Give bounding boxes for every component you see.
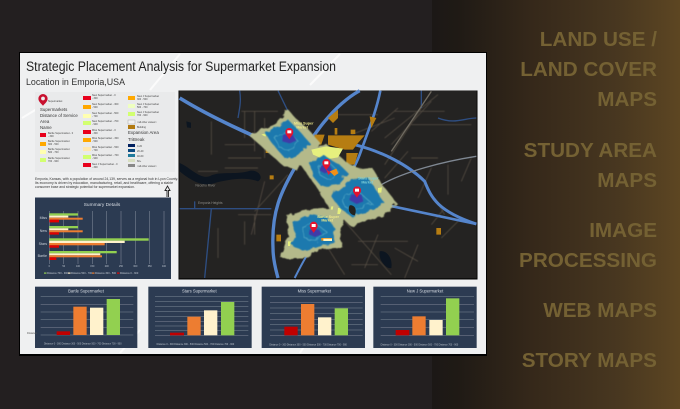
right column: service list bbox=[519, 28, 657, 372]
map sheet bbox=[19, 52, 487, 356]
right column: service list: WEB MAPS bbox=[543, 299, 657, 322]
right column: service list: PROCESSING bbox=[519, 249, 657, 272]
legend labels: 60+ bbox=[137, 160, 142, 163]
map: service area blue bbox=[265, 120, 385, 251]
map labels: Stars Super bbox=[358, 177, 379, 181]
legend swatches bbox=[40, 96, 135, 167]
chart heading: Summary Details bbox=[84, 202, 121, 208]
legend labels: - 300 bbox=[92, 166, 98, 169]
legend labels: <all other values> bbox=[137, 165, 157, 168]
chart: new j supermarket: Distance 0 - 300 Distance 300 - 500 Distance 500 - 700 Distance 700 - 900 bbox=[381, 344, 459, 347]
map: Emporia Heights bbox=[198, 201, 223, 205]
legend headings: Area bbox=[40, 119, 50, 124]
chart: summary details: 250 bbox=[119, 265, 124, 268]
map: service area core bbox=[275, 131, 371, 241]
legend headings: Supermarkets bbox=[40, 107, 68, 112]
legend labels: <all other values> bbox=[137, 121, 157, 124]
legend labels: 500 - 700 bbox=[48, 151, 59, 154]
chart: stars supermarket: Stars Supermarket bbox=[182, 289, 217, 294]
chart: bartle supermarket: Distance 0 - 300 Distance 300 - 500 Distance 500 - 700 Distance 700 - 900 bbox=[44, 342, 122, 345]
legend labels bbox=[48, 94, 159, 169]
chart: summary details: Distance 0 - 300 bbox=[120, 272, 139, 275]
legend labels: Bartle Supermarket - 0 bbox=[48, 132, 74, 135]
map: minor roads bbox=[198, 95, 471, 278]
map: water bbox=[180, 121, 392, 268]
right column: service list: MAPS bbox=[597, 169, 657, 192]
map: service area outer halo bbox=[252, 112, 395, 256]
description text bbox=[35, 177, 178, 189]
chart: bartle supermarket: Bartle Supermarket bbox=[68, 289, 105, 294]
legend labels: - 300 bbox=[92, 132, 98, 135]
background: brown gradient right bbox=[432, 0, 680, 409]
chart: summary details: 300 bbox=[133, 265, 138, 268]
chart: summary details bbox=[35, 198, 171, 279]
map labels: Market bbox=[321, 219, 334, 223]
axis label: Distance bbox=[27, 331, 38, 335]
chart: miss supermarket: Distance 0 - 300 Distance 300 - 500 Distance 500 - 700 Distance 700 - 900 bbox=[269, 344, 348, 347]
subtitle: Location in Emporia,USA bbox=[26, 77, 125, 87]
legend labels: - 300 bbox=[92, 97, 98, 100]
chart: summary details: 0 bbox=[49, 265, 51, 268]
chart: summary details: 50 bbox=[62, 265, 66, 268]
legend labels: - 900 bbox=[92, 123, 98, 126]
legend labels: Supermarket bbox=[48, 100, 63, 103]
description text: Emporia, Kansas, with a population of around 24,139, serves as a regional hub in Lyon County. bbox=[35, 177, 178, 181]
map: buildings bbox=[266, 110, 441, 241]
map: highways bbox=[180, 98, 255, 136]
map bbox=[178, 90, 478, 280]
legend headings: Distance of Service bbox=[40, 113, 78, 118]
map labels: Market bbox=[361, 181, 374, 185]
chart: summary details: Distance 300 - 500 bbox=[95, 272, 117, 275]
legend labels: New J Supermarket bbox=[137, 111, 159, 114]
right column: service list: LAND USE / bbox=[540, 28, 657, 51]
legend labels: Bartle Supermarket bbox=[48, 157, 70, 160]
chart: summary details: 100 bbox=[76, 265, 81, 268]
chart: summary details: Distance 700 - 900 bbox=[47, 272, 69, 275]
legend headings: Expansion Area bbox=[128, 130, 159, 135]
map labels: Market bbox=[296, 126, 309, 130]
legend labels: - 500 bbox=[92, 106, 98, 109]
legend labels: - 900 bbox=[92, 157, 98, 160]
map: Neosho River bbox=[195, 183, 216, 187]
legend labels: Miss Supermarket - 0 bbox=[92, 129, 116, 132]
map: pale green areas bbox=[261, 133, 382, 246]
legend labels: 300 - 500 bbox=[137, 98, 148, 101]
legend labels: - 700 bbox=[92, 149, 98, 152]
title: Strategic Placement Analysis for Supermarket Expansion bbox=[26, 59, 336, 74]
legend labels: New J Supermarket bbox=[137, 103, 159, 106]
description text: consumer base and strategic potential for supermarket expansion. bbox=[35, 185, 135, 189]
right column: service list: STORY MAPS bbox=[522, 349, 657, 372]
legend labels: Miss Supermarket - 300 bbox=[92, 137, 119, 140]
legend labels: New J Supermarket bbox=[137, 95, 159, 98]
chart: summary details: 150 bbox=[90, 265, 95, 268]
legend labels: Miss Supermarket - 500 bbox=[92, 146, 119, 149]
arrow: up bbox=[165, 186, 170, 197]
legend bbox=[35, 92, 175, 172]
legend labels: New Supermarket - 0 bbox=[92, 94, 116, 97]
right column: service list: STUDY AREA bbox=[524, 139, 657, 162]
description text: Its economy is driven by education, manufacturing, retail, and healthcare, offering a stable bbox=[35, 181, 173, 185]
chart: stars supermarket bbox=[148, 287, 252, 348]
chart: summary details: Miss bbox=[40, 216, 47, 220]
legend labels: 20-40 bbox=[137, 150, 144, 153]
legend labels: New Supermarket - 300 bbox=[92, 103, 119, 106]
chart: new j supermarket bbox=[373, 287, 477, 348]
chart: summary details: 400 bbox=[162, 265, 167, 268]
map labels bbox=[294, 122, 379, 223]
legend labels: New J Supermarket - 0 bbox=[92, 163, 118, 166]
legend labels: 40-60 bbox=[137, 155, 144, 158]
legend labels: 500 - 700 bbox=[137, 106, 148, 109]
legend labels: New Supermarket - 700 bbox=[92, 120, 119, 123]
chart: miss supermarket: Miss Supermarket bbox=[298, 289, 332, 294]
legend labels: 300 - 500 bbox=[48, 143, 59, 146]
chart: summary details: 350 bbox=[148, 265, 152, 268]
chart: miss supermarket bbox=[262, 287, 365, 348]
chart: bartle supermarket bbox=[35, 287, 137, 348]
right column: service list: MAPS bbox=[597, 88, 657, 111]
background: dark left bbox=[0, 0, 433, 409]
legend labels: Bartle Supermarket bbox=[48, 148, 70, 151]
legend labels: 0-20 bbox=[137, 145, 143, 148]
chart: summary details: Distance 500 - 700 bbox=[71, 272, 93, 275]
map labels: Miss Super bbox=[294, 122, 314, 126]
legend labels: 700 - 900 bbox=[137, 114, 148, 117]
legend headings bbox=[40, 107, 159, 142]
icon: map pins bbox=[285, 128, 361, 233]
legend labels: New Supermarket - 500 bbox=[92, 112, 119, 115]
legend labels: Bartle Supermarket bbox=[48, 140, 70, 143]
map labels: Bartle Super bbox=[317, 215, 340, 219]
right column: service list: LAND COVER bbox=[520, 58, 657, 81]
chart: new j supermarket: New J Supermarket bbox=[407, 289, 444, 294]
legend labels: - 700 bbox=[92, 115, 98, 118]
chart: summary details: New bbox=[40, 229, 47, 233]
legend labels: 700 - 900 bbox=[48, 160, 59, 163]
right column: service list: IMAGE bbox=[589, 219, 657, 242]
legend labels: - 500 bbox=[92, 140, 98, 143]
chart: summary details: 200 bbox=[105, 265, 109, 268]
chart: stars supermarket: Distance 0 - 300 Distance 300 - 500 Distance 500 - 700 Distance 700 - 900 bbox=[157, 343, 235, 346]
legend headings: Name bbox=[40, 125, 52, 130]
map: secondary blue roads bbox=[180, 91, 476, 278]
legend headings: TriBreak bbox=[128, 137, 145, 142]
legend labels: - 300 bbox=[48, 135, 54, 138]
legend labels: Building bbox=[137, 126, 147, 129]
legend labels: Miss Supermarket - 700 bbox=[92, 154, 119, 157]
chart: summary details: Bartle bbox=[38, 254, 47, 258]
chart: summary details: Stars bbox=[39, 242, 47, 246]
icon: supermarket pin bbox=[38, 94, 48, 106]
